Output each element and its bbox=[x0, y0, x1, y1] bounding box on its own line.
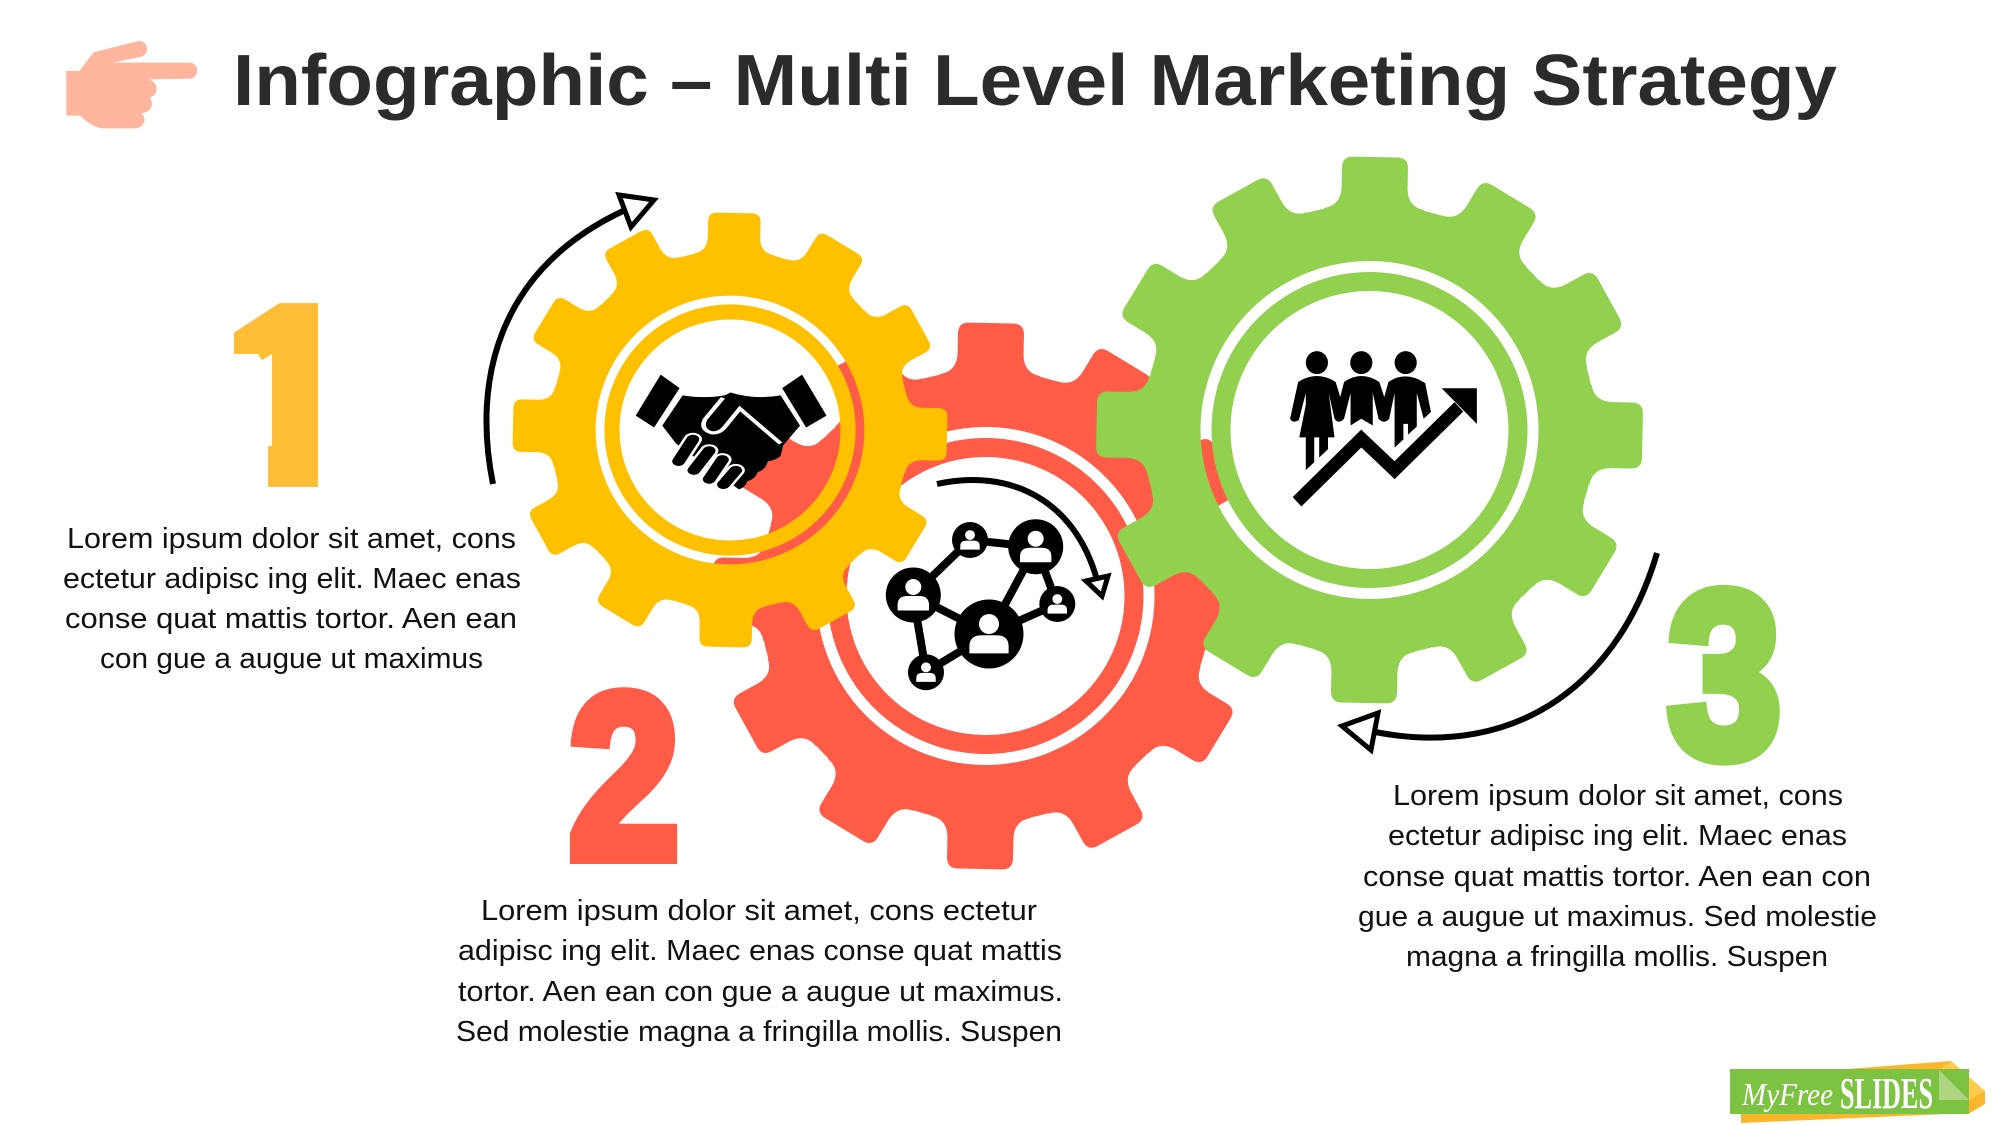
icon: handshake bbox=[636, 375, 827, 489]
text block 3: gue a augue ut maximus. Sed molestie bbox=[1358, 901, 1877, 933]
gear: red (step 2) bbox=[707, 317, 1264, 875]
text block 3: ectetur adipisc ing elit. Maec enas bbox=[1388, 820, 1847, 852]
number 2: 2 bbox=[569, 646, 679, 907]
logo: MyFree Slides bbox=[1730, 1061, 1985, 1123]
text block 2: adipisc ing elit. Maec enas conse quat mattis bbox=[458, 935, 1062, 967]
logo: MyFree Slides: SLIDES bbox=[1840, 1069, 1933, 1118]
number 3: 3 bbox=[1668, 543, 1781, 806]
number 1: 1 bbox=[223, 258, 359, 531]
text block 2: tortor. Aen ean con gue a augue ut maximus. bbox=[458, 976, 1063, 1008]
text block 1: Lorem ipsum dolor sit amet, cons bbox=[67, 523, 516, 555]
text block 3: magna a fringilla mollis. Suspen bbox=[1406, 941, 1828, 973]
text block 3: Lorem ipsum dolor sit amet, cons bbox=[1393, 780, 1843, 812]
text block 1: conse quat mattis tortor. Aen ean bbox=[65, 603, 517, 635]
text block 2 bbox=[456, 895, 1063, 1048]
text block 1: ectetur adipisc ing elit. Maec enas bbox=[63, 563, 521, 595]
icon: pointing hand bbox=[66, 41, 197, 128]
text block 2: Lorem ipsum dolor sit amet, cons ectetur bbox=[481, 895, 1037, 927]
text block 1 bbox=[63, 523, 521, 675]
icon: team growth chart bbox=[1290, 351, 1477, 502]
arrow: around yellow gear bbox=[486, 195, 654, 484]
gear: green (step 3) bbox=[1091, 151, 1648, 709]
gear: yellow (step 1) bbox=[508, 208, 952, 652]
text block 1: con gue a augue ut maximus bbox=[100, 643, 483, 675]
logo: MyFree Slides: MyFree bbox=[1741, 1076, 1833, 1112]
icon: people network bbox=[886, 519, 1075, 690]
text block 2: Sed molestie magna a fringilla mollis. Suspen bbox=[456, 1016, 1062, 1048]
arrow: around green gear bbox=[1342, 553, 1657, 750]
text block 3: conse quat mattis tortor. Aen ean con bbox=[1363, 861, 1871, 893]
text block 3 bbox=[1358, 780, 1877, 973]
title: Infographic – Multi Level Marketing Strategy bbox=[233, 41, 1837, 121]
arrow: inside red gear bbox=[937, 480, 1108, 596]
